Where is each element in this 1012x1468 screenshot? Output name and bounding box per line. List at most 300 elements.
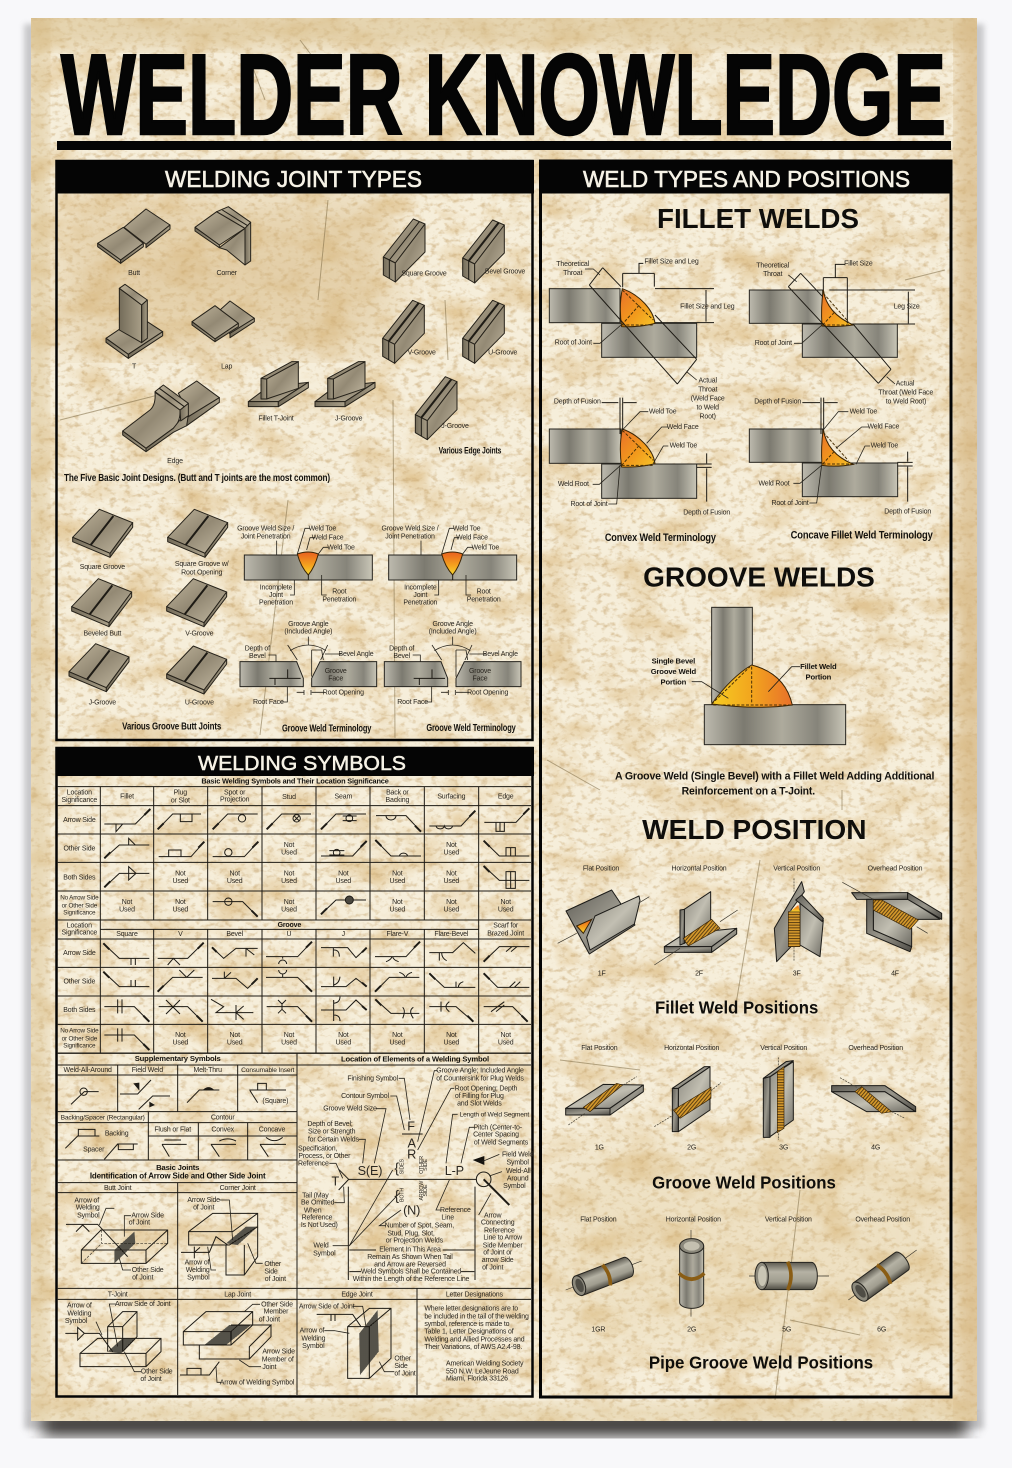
diagram: bevel terminology 1: (Included Angle) — [284, 629, 332, 636]
diagram: element location: Depth of Bevel; — [307, 1121, 353, 1128]
table column headers: Significance — [61, 797, 97, 804]
text: groove weld terminology 1: Groove Weld Terminology — [282, 723, 372, 734]
icon: J-groove — [69, 644, 129, 707]
table row labels — [60, 817, 99, 1050]
text: groove weld caption: A Groove Weld (Single Bevel) with a Fillet Weld Adding Additional — [615, 770, 934, 782]
not used labels: Not — [284, 899, 294, 906]
not used labels: Not — [284, 842, 294, 849]
diagram: concave fillet — [749, 261, 933, 406]
icon: edge joint — [123, 381, 219, 465]
diagram: convex fillet: (Weld Face — [691, 395, 725, 402]
text: groove weld terminology 2: Groove Weld Terminology — [426, 723, 516, 734]
diagram: groove weld penetration 2: Weld Toe — [453, 526, 481, 533]
diagram: element location: Groove Weld Size — [323, 1106, 377, 1113]
icon: 4G: 4G — [871, 1144, 880, 1151]
table row labels: Both Sides — [63, 1007, 96, 1014]
icon: edge joint: Edge — [167, 458, 183, 465]
supplementary symbols: Backing — [105, 1130, 129, 1137]
diagram: element location: Tail (May — [302, 1192, 329, 1199]
supplementary symbols: Spacer — [83, 1146, 105, 1153]
diagram: butt joint: Welding — [76, 1205, 100, 1212]
groove headers: Bevel — [226, 931, 244, 938]
icon: 2G pipe: 2G — [687, 1326, 696, 1333]
diagram: corner joint: Welding — [186, 1267, 210, 1274]
icon: 2F — [654, 866, 738, 978]
diagram: element location: Symbol — [507, 1159, 529, 1166]
table row labels: No Arrow Side — [60, 895, 99, 902]
not used labels: Not — [392, 871, 403, 878]
diagram: concave weld terminology — [749, 398, 931, 515]
not used labels: Not — [500, 1032, 511, 1039]
table column headers: Stud — [282, 794, 296, 801]
icon: square groove with root opening: Square Groove w/ — [175, 561, 229, 568]
diagram: element location: arrow Side — [482, 1257, 514, 1264]
diagram: element location: of Joint or — [483, 1250, 513, 1257]
icon: 3G — [760, 1045, 807, 1151]
diagram: T-joint — [65, 1291, 173, 1383]
icon: lap joint — [192, 301, 254, 370]
icon: T joint — [106, 284, 163, 370]
diagram: groove weld penetration 1: Groove Weld Size / — [237, 526, 294, 533]
not used labels: Used — [444, 878, 459, 885]
text: groove weld caption — [615, 770, 934, 797]
diagram: butt joint: Butt Joint — [104, 1185, 132, 1192]
diagram: T-joint: Arrow of — [67, 1303, 92, 1310]
not used labels: Not — [446, 1032, 457, 1039]
diagram: convex fillet: Throat — [698, 386, 717, 393]
diagram: concave weld terminology: Root of Joint — [771, 500, 809, 507]
diagram: concave fillet: Fillet Size — [844, 261, 873, 268]
supplementary symbols — [61, 1067, 294, 1159]
pipe position diagrams — [566, 1217, 917, 1372]
diagram: concave fillet: Theoretical — [756, 262, 790, 269]
heading: groove welds: GROOVE WELDS — [643, 562, 875, 593]
table row labels: Significance — [63, 910, 96, 917]
icon: 2G — [654, 1045, 721, 1151]
diagram: element location: Weld Symbols Shall be Contained — [361, 1269, 461, 1276]
groove headers: V — [178, 931, 183, 938]
diagram: butt joint: of Joint — [132, 1275, 153, 1282]
heading: weld types and positions: WELD TYPES AND POSITIONS — [583, 166, 910, 192]
icon: 6G pipe — [848, 1217, 917, 1333]
diagram: element location: and Arrow are Reversed — [374, 1262, 446, 1269]
diagram: T-joint: of Joint — [140, 1376, 162, 1383]
diagram: convex fillet: Actual — [698, 377, 717, 384]
diagram: groove weld penetration 2: Joint Penetration — [385, 534, 435, 541]
icon: square groove edge: Square Groove — [401, 270, 447, 277]
groove headers — [116, 922, 524, 938]
icon: fillet T-joint: Fillet T-Joint — [258, 415, 294, 422]
icon: butt joint: Butt — [128, 270, 140, 277]
diagram: edge joint: Edge Joint — [341, 1291, 373, 1298]
not used labels: Used — [119, 906, 135, 913]
diagram: element location: Reference — [302, 1215, 333, 1222]
not used labels: Not — [122, 899, 132, 906]
text: letter designations: symbol, reference is made to — [424, 1321, 510, 1328]
diagram: concave fillet: Throat — [763, 271, 782, 278]
text: letter designations — [424, 1291, 529, 1383]
diagram: element location: for Certain Welds — [308, 1136, 359, 1143]
diagram: concave fillet: Leg Size — [894, 304, 920, 311]
diagram: element location: Line to Arrow — [483, 1235, 523, 1242]
diagram: bevel terminology 2: Groove Angle — [432, 621, 473, 628]
heading: welding joint types: WELDING JOINT TYPES — [165, 166, 422, 192]
diagram: convex fillet: Root) — [700, 413, 716, 420]
diagram: element location: S(E) — [358, 1164, 382, 1178]
text: letter designations: Table 1, Letter Designations of — [424, 1329, 514, 1336]
diagram: T-joint groove weld: Portion — [806, 672, 832, 681]
icon: J-groove edge — [415, 377, 469, 440]
diagram: element location: Connecting — [481, 1220, 515, 1227]
icon: 1GR pipe: Flat Position — [580, 1217, 617, 1224]
text: groove weld positions: Groove Weld Positions — [652, 1172, 836, 1192]
diagram: convex weld terminology: Weld Face — [667, 424, 699, 431]
diagram: element location: Element In This Area — [379, 1246, 441, 1253]
not used labels: Used — [173, 1039, 188, 1046]
fillet diagrams — [549, 258, 934, 544]
not used labels: Not — [446, 842, 457, 849]
heading: basic joints: Basic Joints — [156, 1163, 199, 1172]
diagram: lap joint: Other Side — [261, 1301, 293, 1308]
diagram: element location: Center Spacing — [473, 1132, 519, 1139]
table column headers: Plug — [174, 790, 187, 797]
supplementary symbols: Consumable Insert — [241, 1067, 294, 1074]
diagram: element location: Specification, — [298, 1146, 337, 1153]
diagram: element location: Within the Length of the Reference Line — [353, 1276, 470, 1283]
diagram: groove weld penetration 2: Weld Face — [456, 535, 488, 542]
diagram: lap joint: Arrow Side — [262, 1349, 295, 1356]
diagram: element location: or Projection Welds — [386, 1238, 444, 1245]
icon: butt joint — [98, 209, 170, 277]
diagram: T-joint groove weld: Fillet Weld — [800, 662, 837, 671]
heading: location of elements: Location of Elements of a Welding Symbol — [341, 1054, 489, 1063]
text: five basic joint designs: The Five Basic Joint Designs. (Butt and T joints are the most common) — [64, 473, 330, 484]
icon: bevel groove edge: Bevel Groove — [485, 269, 525, 276]
diagram: groove weld penetration 1: Joint — [269, 592, 283, 599]
icon: J-groove T-joint: J-Groove — [335, 415, 363, 422]
lower symbol section — [58, 1053, 534, 1395]
icon: 2G: Horizontal Position — [664, 1045, 719, 1052]
icon: fillet T-joint — [248, 362, 308, 422]
icon: 3G: Vertical Position — [760, 1045, 807, 1052]
weld position diagrams — [558, 866, 942, 1192]
diagram: element location: Finishing Symbol — [347, 1075, 399, 1082]
diagram: concave weld terminology: Weld Toe — [850, 408, 877, 415]
diagram: convex weld terminology: Depth of Fusion — [683, 509, 730, 516]
icon: V-groove: V-Groove — [185, 630, 214, 637]
icon: V-groove — [167, 579, 227, 637]
diagram: groove weld penetration 2: Weld Toe — [472, 544, 499, 551]
diagram: element location: of Joint — [482, 1264, 503, 1271]
table column headers: Backing — [385, 797, 409, 804]
icon: beveled butt — [72, 579, 132, 637]
diagram: bevel terminology 2: Face — [473, 676, 488, 683]
supplementary symbols: (Square) — [262, 1098, 288, 1105]
table column headers: Location — [67, 790, 92, 797]
groove headers: Brazed Joint — [487, 930, 524, 937]
icon: square groove: Square Groove — [80, 564, 125, 571]
not used labels: Used — [281, 878, 297, 885]
supplementary symbols: Flush or Flat — [154, 1127, 191, 1134]
diagram: element location: Symbol — [503, 1183, 526, 1190]
panel: welding symbols — [56, 747, 534, 1396]
diagram: corner joint: Other — [264, 1261, 282, 1268]
icon: square groove — [73, 509, 133, 571]
diagram: element location: Number of Spot, Seam, — [385, 1223, 454, 1230]
icon: U-groove edge: U-Groove — [488, 349, 517, 356]
diagram: edge joint: of Joint — [394, 1371, 416, 1378]
text: concave fillet weld terminology: Concave Fillet Weld Terminology — [791, 530, 934, 542]
supplementary symbols: Contour — [211, 1114, 235, 1121]
diagram: element location: BOTH — [399, 1188, 405, 1202]
text: various groove butt joints: Various Groove Butt Joints — [122, 721, 221, 732]
diagram: element location: Pitch (Center-to- — [473, 1124, 523, 1131]
diagram: bevel terminology 2: Bevel — [393, 653, 411, 660]
table row labels: Significance — [63, 1043, 96, 1050]
diagram: edge joint: Other — [394, 1355, 412, 1362]
diagram: element location: Line — [441, 1215, 454, 1222]
icon: 1F: 1F — [598, 971, 606, 978]
diagram: element location: of Countersink for Plug Welds — [436, 1076, 524, 1083]
not used labels: Not — [338, 1032, 349, 1039]
diagram: convex fillet: Throat — [563, 270, 582, 277]
icon: U-groove: U-Groove — [185, 700, 214, 707]
diagram: element location: Reference — [298, 1160, 329, 1167]
icon: U-groove — [167, 646, 227, 707]
not used labels: Used — [390, 878, 405, 885]
panel: weld types and positions — [539, 160, 952, 1397]
diagram: corner joint: Symbol — [187, 1275, 210, 1282]
icon: 1F — [558, 866, 649, 978]
diagram: lap joint: of Joint — [259, 1316, 280, 1323]
not used labels: Used — [444, 906, 459, 913]
diagram: concave weld terminology: Depth of Fusion — [754, 399, 801, 406]
icon: 1GR pipe — [566, 1217, 642, 1333]
supplementary symbols: Melt-Thru — [193, 1067, 222, 1074]
text: pipe groove weld positions: Pipe Groove Weld Positions — [649, 1352, 873, 1372]
diagram: element location: R — [407, 1147, 416, 1161]
diagram: T-joint groove weld — [651, 607, 846, 745]
not used labels: Not — [284, 1032, 294, 1039]
diagram: butt joint: Arrow Side — [131, 1212, 164, 1219]
table row labels: Other Side — [63, 979, 95, 986]
icon: 3F: Vertical Position — [773, 866, 820, 873]
supplementary symbols: Backing/Spacer (Rectangular) — [61, 1114, 145, 1121]
diagram: element location: OTHER — [419, 1156, 425, 1174]
icon: 2G: 2G — [687, 1144, 696, 1151]
groove welds section — [615, 562, 934, 845]
diagram: bevel terminology 1: Root Opening — [323, 689, 364, 696]
symbols: groove welds — [103, 942, 529, 1050]
not used labels: Used — [281, 906, 297, 913]
diagram: convex weld terminology: Root of Joint — [570, 501, 608, 508]
supplementary symbols: Concave — [259, 1127, 285, 1134]
title rule — [57, 141, 951, 150]
diagram: element location: Field Weld — [502, 1151, 534, 1158]
not used labels: Used — [444, 849, 459, 856]
diagram: lap joint: Joint — [262, 1364, 277, 1371]
not used labels: Not — [446, 899, 457, 906]
text: convex weld terminology: Convex Weld Terminology — [605, 532, 717, 544]
diagram: groove weld penetration 1: Weld Toe — [327, 544, 355, 551]
table row labels: Other Side — [63, 846, 95, 853]
diagram: groove weld penetration 1: Penetration — [322, 597, 357, 604]
not used labels: Used — [173, 878, 188, 885]
icon: 5G pipe: Vertical Position — [765, 1217, 812, 1224]
table column headers: Projection — [220, 797, 250, 804]
icon: corner joint: Corner — [216, 270, 238, 277]
text: letter designations: Welding and Allied Processes and — [424, 1336, 525, 1343]
not used labels: Used — [227, 1039, 243, 1046]
diagram: element location — [298, 1068, 534, 1283]
symbols: basic welds — [104, 808, 529, 917]
heading: basic joints: Identification of Arrow Side and Other Side Joint — [90, 1171, 266, 1180]
diagram: element location: { — [394, 1159, 399, 1175]
diagram: lap joint: Member — [264, 1309, 289, 1316]
diagram: element location: ARROW — [419, 1180, 425, 1200]
table row labels: No Arrow Side — [60, 1028, 99, 1035]
diagram: element location: Size or Strength — [308, 1129, 356, 1136]
diagram: convex fillet — [549, 258, 735, 420]
diagram: element location: SIDE — [423, 1184, 429, 1197]
diagram: concave weld terminology: Weld Root — [759, 480, 790, 487]
diagram: bevel terminology 2: Groove — [469, 668, 491, 675]
diagram: groove weld penetration 2: Penetration — [467, 597, 501, 604]
not used labels: Not — [175, 871, 186, 878]
table column headers — [61, 790, 514, 804]
text: letter designations: 550 N.W. LeJeune Road — [446, 1368, 519, 1375]
text: fillet weld positions: Fillet Weld Positions — [655, 997, 818, 1017]
icon: 5G pipe: 5G — [782, 1326, 791, 1333]
diagram: groove weld penetration 1: Penetration — [259, 600, 293, 607]
icon: 2F: 2F — [695, 971, 703, 978]
not used labels: Used — [390, 906, 405, 913]
icon: square groove with root opening — [168, 509, 229, 576]
diagram: corner joint: of Joint — [265, 1276, 286, 1283]
diagram: concave weld terminology: Weld Toe — [871, 442, 898, 449]
icon: 3F — [773, 866, 823, 978]
text: letter designations: Their Variations, of AWS A2.4-98. — [424, 1344, 522, 1351]
heading: weld position: WELD POSITION — [642, 814, 866, 845]
heading: welding symbols: WELDING SYMBOLS — [198, 753, 406, 775]
diagram: convex fillet: Fillet Size and Leg — [644, 258, 699, 265]
not used labels: Not — [229, 1032, 240, 1039]
groove headers: U — [287, 931, 292, 938]
diagram: bevel terminology 2: Depth of — [389, 645, 414, 652]
diagram: convex weld terminology: Depth of Fusion — [554, 399, 601, 406]
diagram: element location: SIDE — [423, 1159, 429, 1171]
groove headers: Scarf for — [493, 923, 519, 930]
panel: welding joint types — [56, 160, 534, 740]
diagram: T-joint: Other Side — [141, 1369, 173, 1376]
not used labels: Not — [284, 871, 294, 878]
icon: 4G: Overhead Position — [848, 1045, 903, 1052]
diagram: element location: Weld — [313, 1243, 329, 1250]
diagram: element location: Be Omitted — [301, 1200, 335, 1207]
groove headers: Groove — [278, 922, 301, 929]
not used labels: Not — [500, 899, 511, 906]
diagram: edge joint: Symbol — [302, 1343, 325, 1350]
not used labels: Used — [173, 906, 188, 913]
icon: 2G pipe: Horizontal Position — [666, 1217, 721, 1224]
table row labels: Arrow Side — [63, 817, 96, 824]
diagram: butt joint: of Joint — [129, 1220, 150, 1227]
groove headers: Flare-V — [386, 931, 409, 938]
diagram: concave fillet: to Weld Root) — [886, 399, 926, 406]
diagram: T-joint: Arrow Side of Joint — [115, 1301, 171, 1308]
table row labels: Significance — [61, 930, 97, 937]
diagram: corner joint: Side — [264, 1268, 278, 1275]
diagram: groove weld penetration 2: Groove Weld Size / — [381, 526, 439, 533]
diagram: groove weld penetration 1 — [237, 526, 372, 607]
not used labels: Used — [227, 878, 243, 885]
not used labels: Used — [281, 849, 297, 856]
supplementary symbols: Convex — [211, 1127, 235, 1134]
diagram: bevel terminology 2: Root Face — [397, 699, 428, 706]
icon: 5G pipe — [749, 1217, 829, 1333]
not used labels: Not — [229, 871, 240, 878]
not used labels: Used — [336, 1039, 351, 1046]
diagram: edge joint: Arrow Side of Joint — [299, 1303, 355, 1310]
diagram: convex weld terminology: Weld Root — [558, 481, 589, 488]
diagram: element location: { — [394, 1187, 399, 1203]
diagram: T-joint: Welding — [67, 1310, 92, 1317]
icon: 4F — [842, 866, 942, 978]
table title: Basic Welding Symbols and Their Location Significance — [201, 776, 389, 785]
supplementary symbols: Field Weld — [132, 1067, 163, 1074]
diagram: butt joint — [66, 1185, 168, 1282]
text: letter designations: Where letter designations are to — [424, 1306, 518, 1313]
table row labels: or Other Side — [62, 1035, 98, 1042]
table column headers: Spot or — [224, 790, 246, 797]
icon: 1G: 1G — [595, 1144, 604, 1151]
diagram: butt joint: Other Side — [132, 1267, 164, 1274]
diagram: bevel terminology 1: Face — [328, 676, 343, 683]
diagram: concave fillet: Root of Joint — [755, 340, 792, 347]
icon: beveled butt: Beveled Butt — [84, 630, 121, 637]
diagram: element location: Around — [507, 1175, 529, 1182]
diagram: groove weld penetration 2: Incomplete — [404, 584, 437, 591]
diagram: corner joint: Corner Joint — [220, 1185, 256, 1192]
text: various edge joints: Various Edge Joints — [439, 445, 501, 455]
text: letter designations: Letter Designations — [446, 1291, 504, 1298]
diagram: convex weld terminology — [549, 398, 730, 516]
icon: 2G pipe — [666, 1217, 721, 1333]
diagram: butt joint: Symbol — [77, 1212, 100, 1219]
diagram: convex weld terminology: Weld Toe — [649, 408, 677, 415]
table column headers: Edge — [498, 793, 514, 800]
heading: fillet welds: FILLET WELDS — [657, 203, 859, 234]
icon: square groove with root opening: Root Opening — [181, 569, 222, 576]
diagram: element location: Root Opening; Depth — [455, 1085, 518, 1092]
diagram: bevel terminology 1: Groove — [325, 668, 347, 675]
not used labels: Not — [175, 899, 186, 906]
diagram: element location: Weld-All- — [506, 1168, 534, 1175]
diagram: element location: Length of Weld Segment — [460, 1111, 529, 1118]
not used labels: Not — [392, 1032, 403, 1039]
diagram: element location: and Slot Welds — [457, 1100, 502, 1107]
diagram: corner joint — [181, 1185, 286, 1283]
table column headers: or Slot — [171, 797, 190, 804]
not used labels: Used — [281, 1039, 297, 1046]
icon: V-groove edge — [383, 300, 436, 363]
icon: square groove edge — [383, 219, 447, 282]
diagram: bevel terminology 1: Bevel Angle — [338, 651, 374, 658]
diagram: convex fillet: to Weld — [696, 404, 719, 411]
diagram: convex fillet: Root of Joint — [555, 340, 592, 347]
diagram: groove weld penetration 2: Root — [477, 589, 491, 596]
table row labels: Arrow Side — [63, 950, 96, 957]
